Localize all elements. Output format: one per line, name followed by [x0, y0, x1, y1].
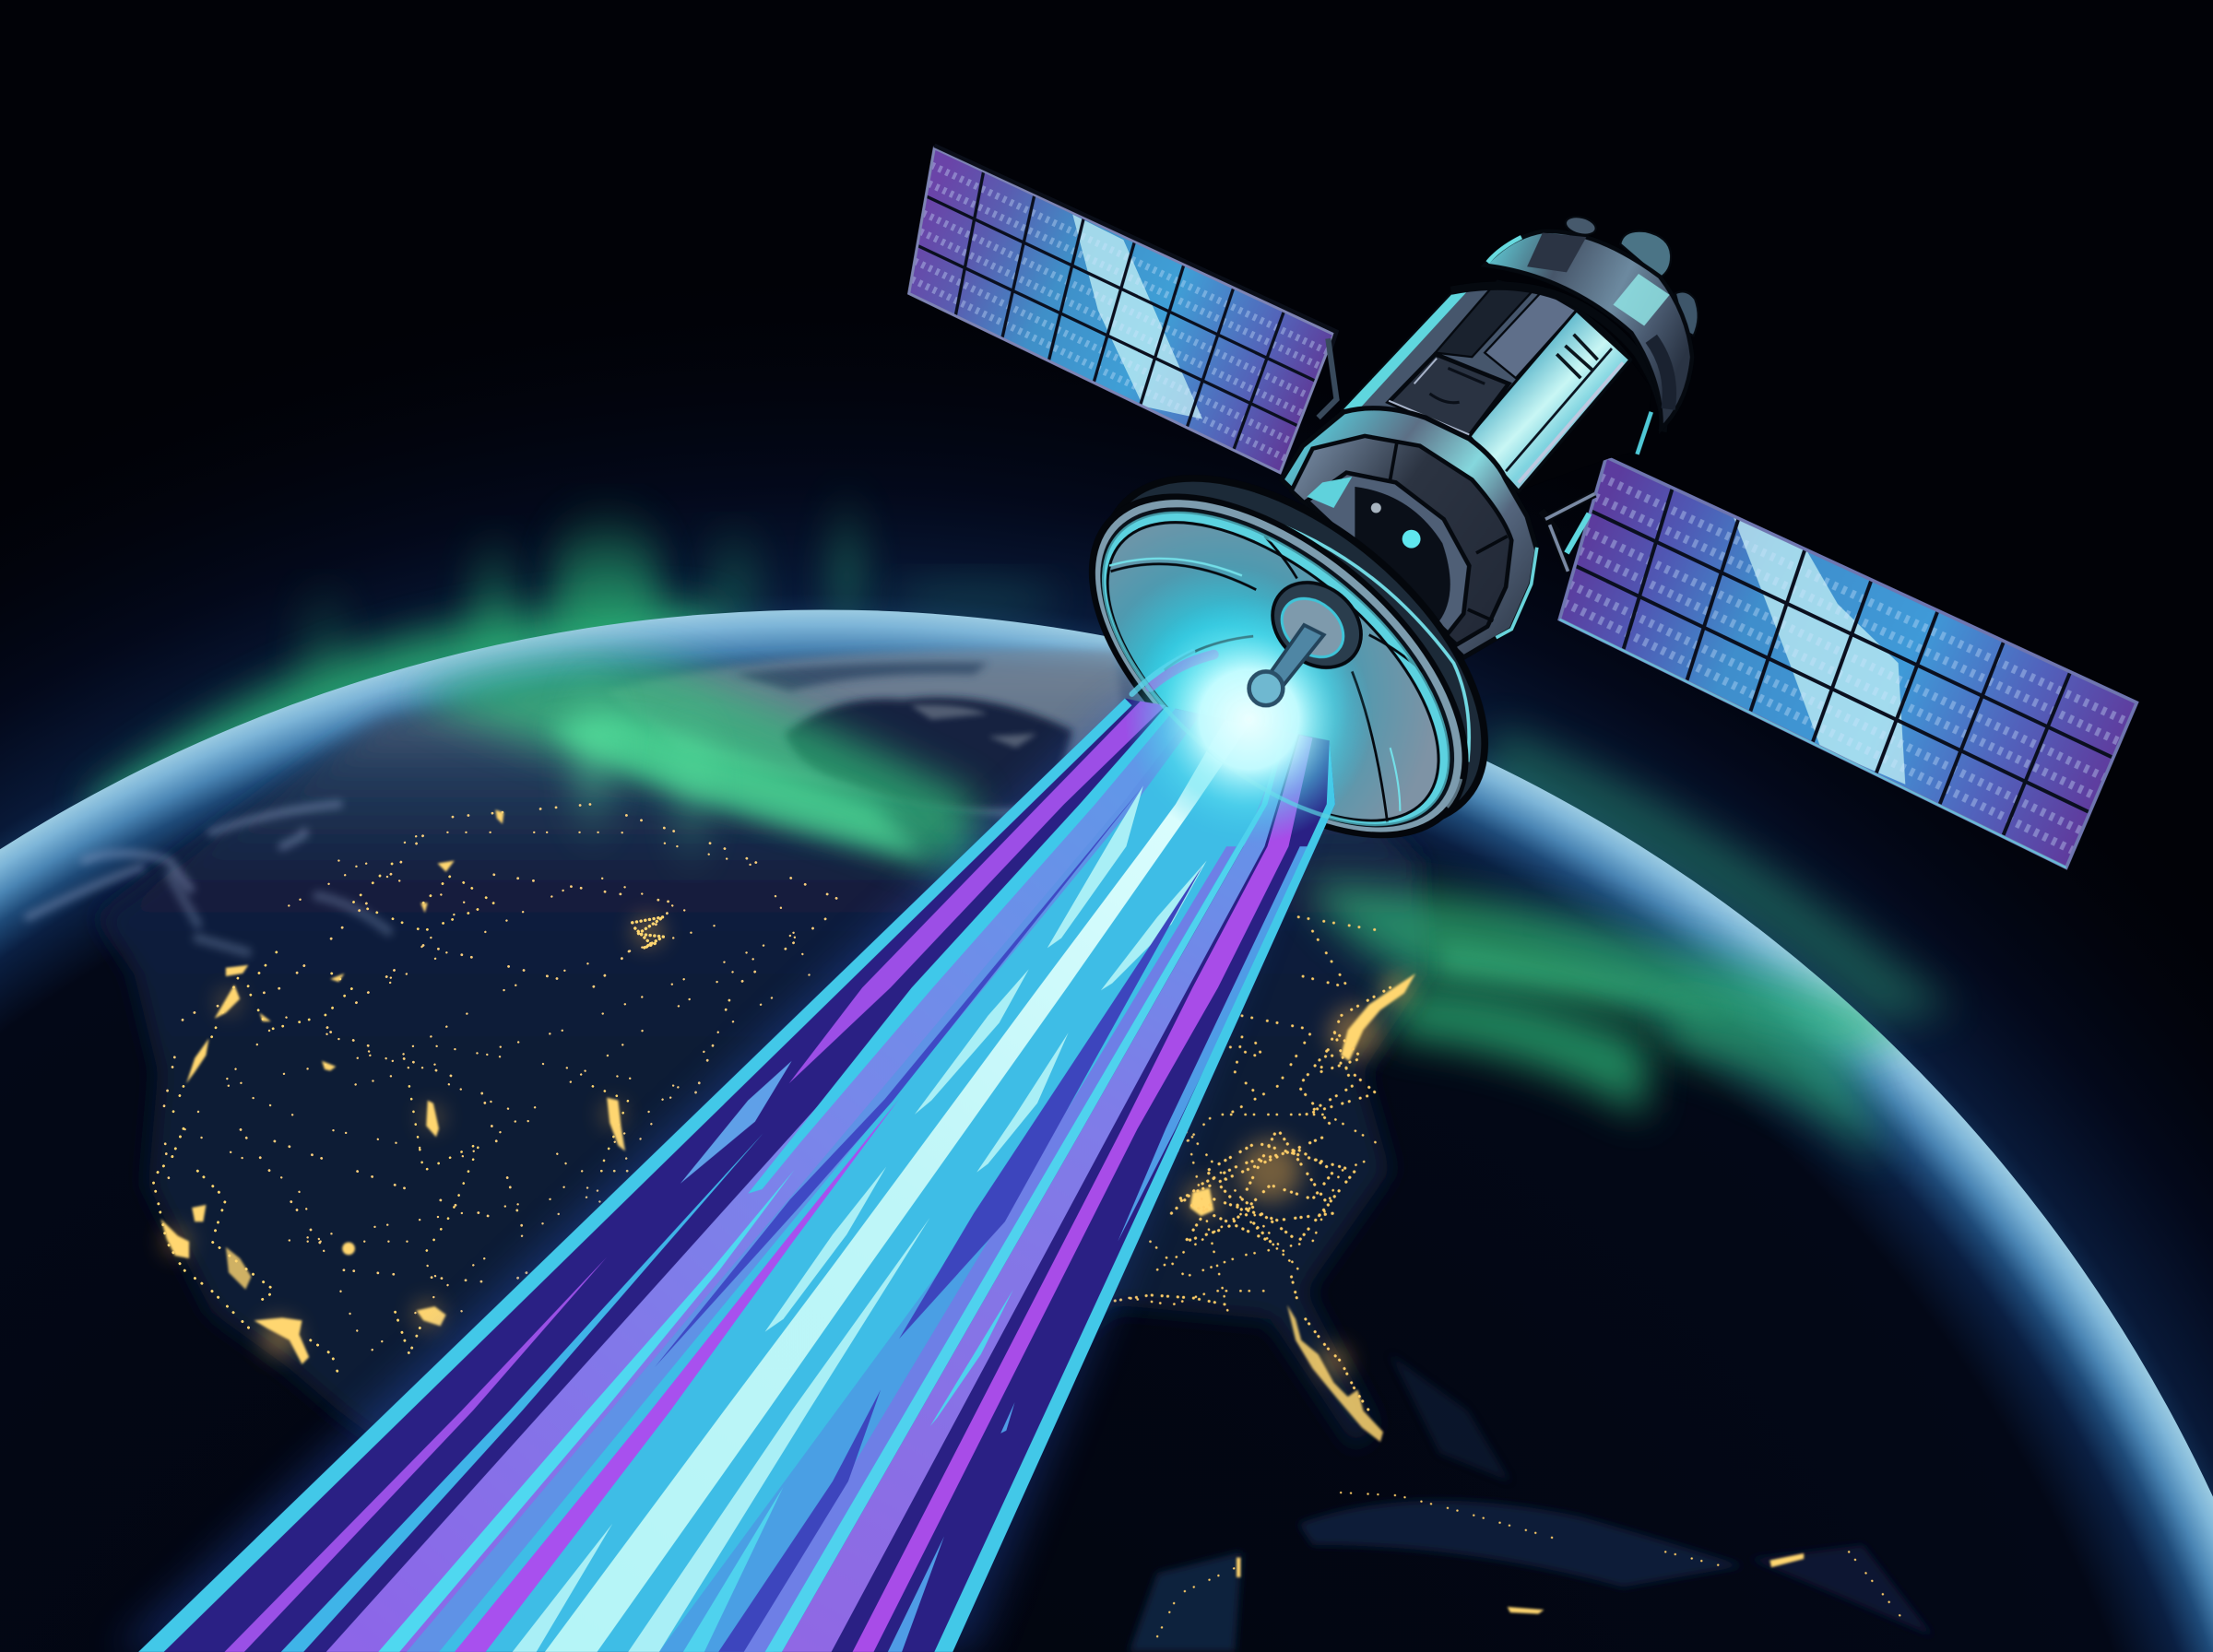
- beam top curves into dish: [1132, 652, 1213, 694]
- cyan streak: [683, 1487, 783, 1652]
- feed knob: [1249, 671, 1283, 705]
- dish face: [1056, 467, 1490, 876]
- access door: [1389, 354, 1509, 436]
- right violet band: [782, 732, 1298, 1652]
- panel cell dots: [1564, 477, 2128, 851]
- feed arm: [1263, 625, 1324, 691]
- signal beam: [138, 437, 1521, 1652]
- emission glow: [1125, 596, 1373, 844]
- beam edge left: [138, 699, 1132, 1652]
- pale streaks: [513, 785, 1207, 1652]
- dish ribs: [1109, 537, 1423, 822]
- dish back: [1041, 411, 1547, 892]
- city lights: east coast: [1189, 974, 1804, 1614]
- panel glare: [1072, 215, 1202, 419]
- parabolic dish: [1028, 411, 1547, 904]
- thin left stripe: [281, 1133, 763, 1652]
- satellite: [909, 146, 2136, 904]
- top dome: [1485, 231, 1692, 429]
- feed hub: [1256, 565, 1378, 685]
- main cylinder: [1343, 281, 1651, 491]
- lower ring: [1282, 408, 1537, 657]
- cylinder shadow side: [1519, 360, 1651, 491]
- city lights: west and central: [160, 809, 625, 1364]
- panel struts: [1541, 494, 1595, 572]
- caribbean islands: [1129, 1354, 1934, 1652]
- panel grid: [917, 171, 1316, 450]
- dense city dots east coast: [1115, 917, 1905, 1636]
- main magenta streak: [455, 1099, 899, 1652]
- right blue violet band: [741, 846, 1237, 1652]
- collar band: [1450, 286, 1663, 431]
- earth globe: [0, 610, 2213, 1652]
- blue band: [407, 713, 1205, 1652]
- upper magenta streak: [789, 702, 1166, 1083]
- beam edge right: [934, 740, 1335, 1652]
- panel frame: [1559, 457, 2136, 867]
- dark hull band: [1436, 281, 1534, 357]
- cylinder shell: [1343, 284, 1630, 491]
- rear node: [1355, 487, 1450, 620]
- long right cyan stripe: [765, 731, 1287, 1652]
- gray hull band: [1485, 290, 1577, 378]
- wide violet band: [326, 708, 1201, 1652]
- cyan edge highlight: [1343, 289, 1469, 409]
- city light glows: [164, 917, 1413, 1377]
- dish outer rim: [1028, 428, 1530, 904]
- signal beam glow: [112, 699, 1330, 1652]
- bright hull panel: [1469, 311, 1630, 491]
- right magenta streak: [852, 735, 1312, 1652]
- vent lines: [1556, 335, 1598, 378]
- panel face: [909, 148, 1333, 473]
- north america landmass: [99, 662, 1428, 1495]
- white core: [545, 719, 1249, 1652]
- hudson bay and arctic land: [607, 650, 1129, 819]
- feed hub and arm: [1249, 565, 1378, 705]
- solar panel: left: [909, 146, 1336, 473]
- central cyan band: [439, 714, 1284, 1652]
- solar panel: right: [1541, 457, 2136, 867]
- panel frame: [909, 148, 1333, 473]
- scattered small town lights: [162, 804, 846, 1354]
- thruster nozzles: [1564, 214, 1698, 336]
- panel face: [1559, 457, 2136, 867]
- lower purple streak: [224, 1257, 607, 1652]
- thin cyan streak: [930, 1290, 1013, 1426]
- beam base: [138, 699, 1335, 1652]
- panel cell dots: [912, 165, 1327, 458]
- small blue streak: [680, 1061, 792, 1184]
- upper cyan lens: [748, 707, 1176, 1194]
- dense city dots west and central: [152, 860, 663, 1375]
- aurora over the surface: [409, 657, 1926, 1164]
- left cyan stripe: [378, 1170, 795, 1652]
- small right blue streaks: [888, 846, 1311, 1652]
- dish rim over beam: [1036, 437, 1521, 895]
- right blue band: [659, 1199, 1040, 1652]
- thin indigo streak: [655, 785, 1143, 1367]
- panel glare: [1734, 516, 1905, 785]
- panel grid: [1575, 488, 2112, 836]
- indigo streaks: [718, 1389, 881, 1652]
- snowy mountains: [29, 804, 388, 952]
- aurora above the horizon: [85, 527, 1955, 1022]
- panel strut: [1319, 338, 1336, 418]
- earth surface: [29, 650, 1934, 1652]
